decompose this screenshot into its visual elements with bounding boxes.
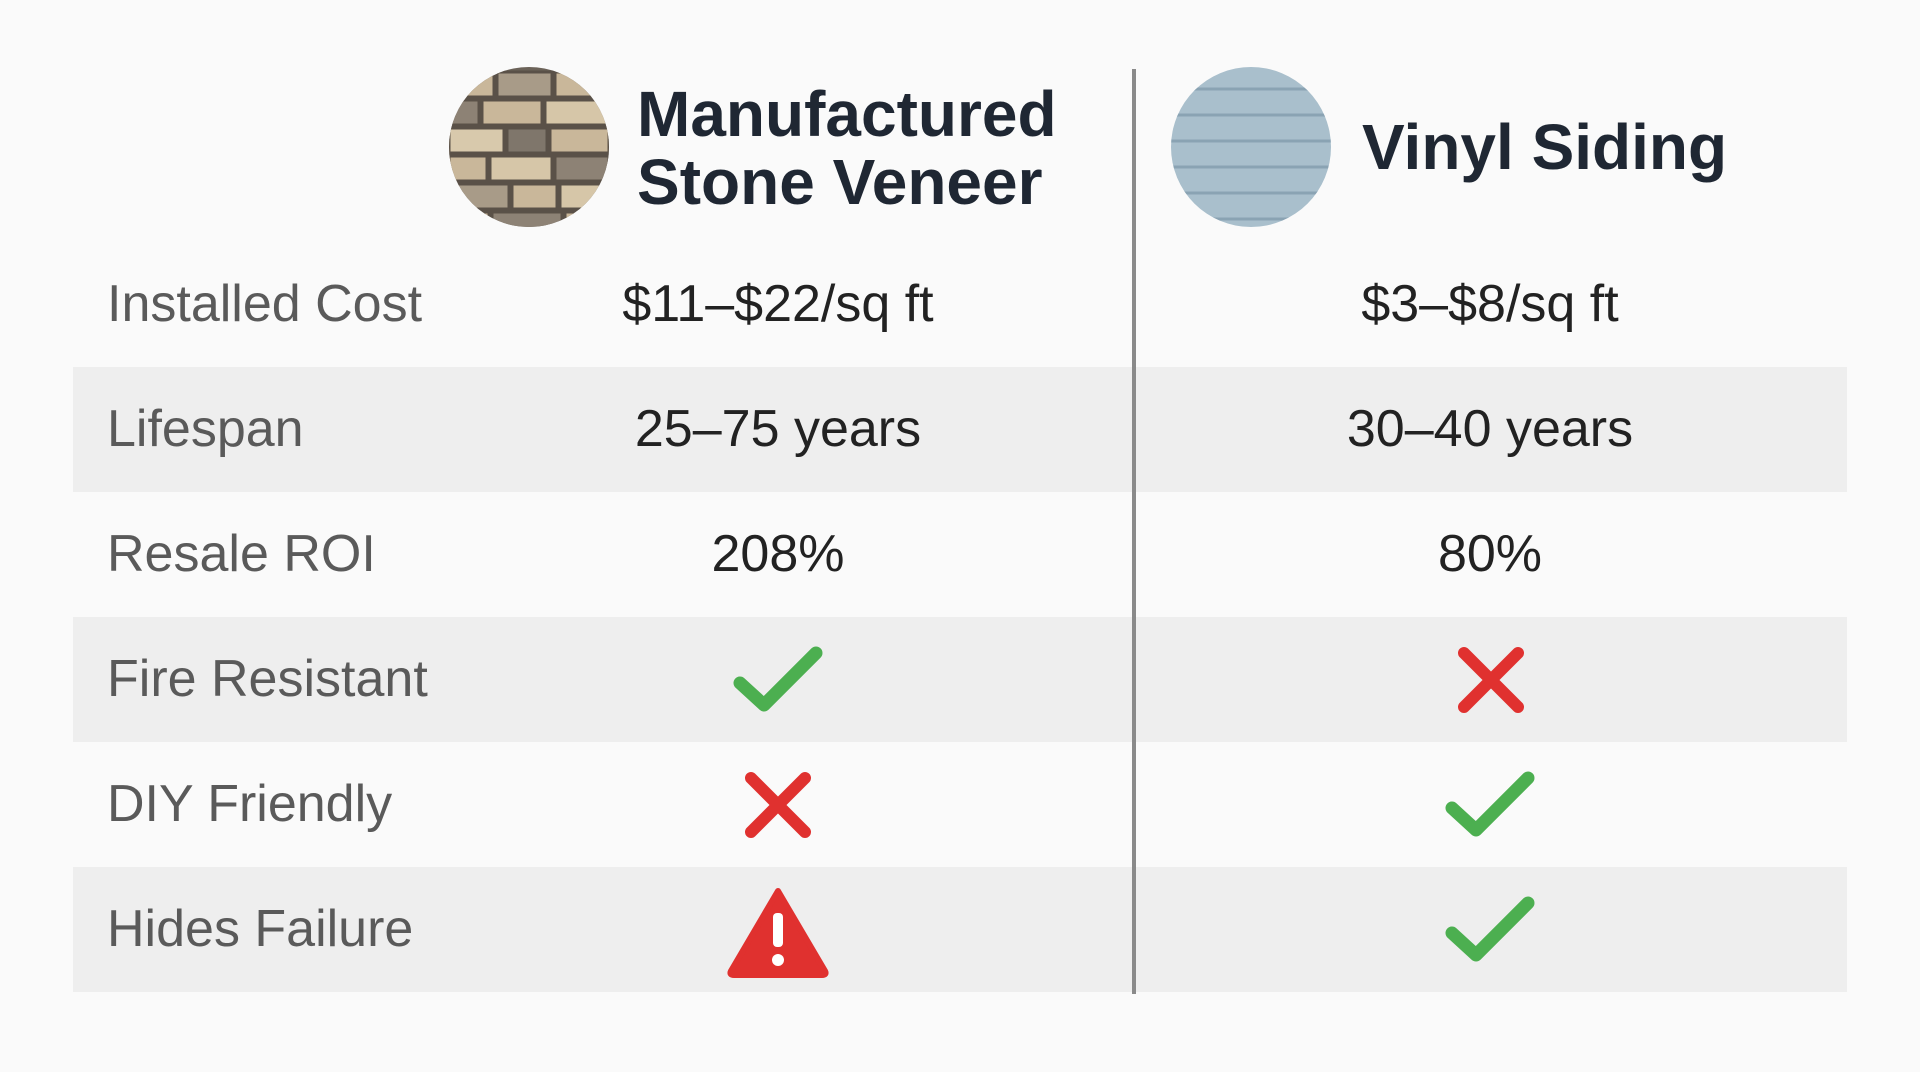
title: Manufactured Stone Veneer: Stone Veneer [637,146,1042,218]
row: Resale ROI: Resale ROI [107,525,376,583]
row: Installed Cost [107,275,1619,333]
row: Hides Failure [107,888,1534,978]
row: Resale ROI: 208% [712,525,844,583]
title: Manufactured Stone Veneer [637,78,1057,218]
title: Vinyl Siding: Vinyl Siding [1362,111,1727,183]
row: Resale ROI [107,525,1542,583]
icon: warning [727,888,829,978]
row: Fire Resistant: Fire Resistant [107,650,428,708]
icon: check [1446,896,1534,962]
row: Installed Cost: $3–$8/sq ft [1361,275,1619,333]
row: DIY Friendly: DIY Friendly [107,775,392,833]
title: Manufactured Stone Veneer: Manufactured [637,78,1057,150]
row: Resale ROI: 80% [1438,525,1542,583]
row: Installed Cost: Installed Cost [107,275,422,333]
icon: cross [1458,647,1524,713]
icon: stone veneer [449,67,609,227]
row: DIY Friendly [107,772,1534,838]
row: Lifespan [107,400,1633,458]
column divider [1132,69,1136,994]
row: Installed Cost: $11–$22/sq ft [622,275,934,333]
icon: cross [745,772,811,838]
icon: check [734,646,822,712]
icon: vinyl siding [1171,67,1331,227]
icon: check [1446,772,1534,836]
row: Fire Resistant [107,646,1524,713]
row: Lifespan: 30–40 years [1347,400,1633,458]
row: Hides Failure: Hides Failure [107,900,413,958]
row: Lifespan: 25–75 years [635,400,921,458]
row: Lifespan: Lifespan [107,400,304,458]
